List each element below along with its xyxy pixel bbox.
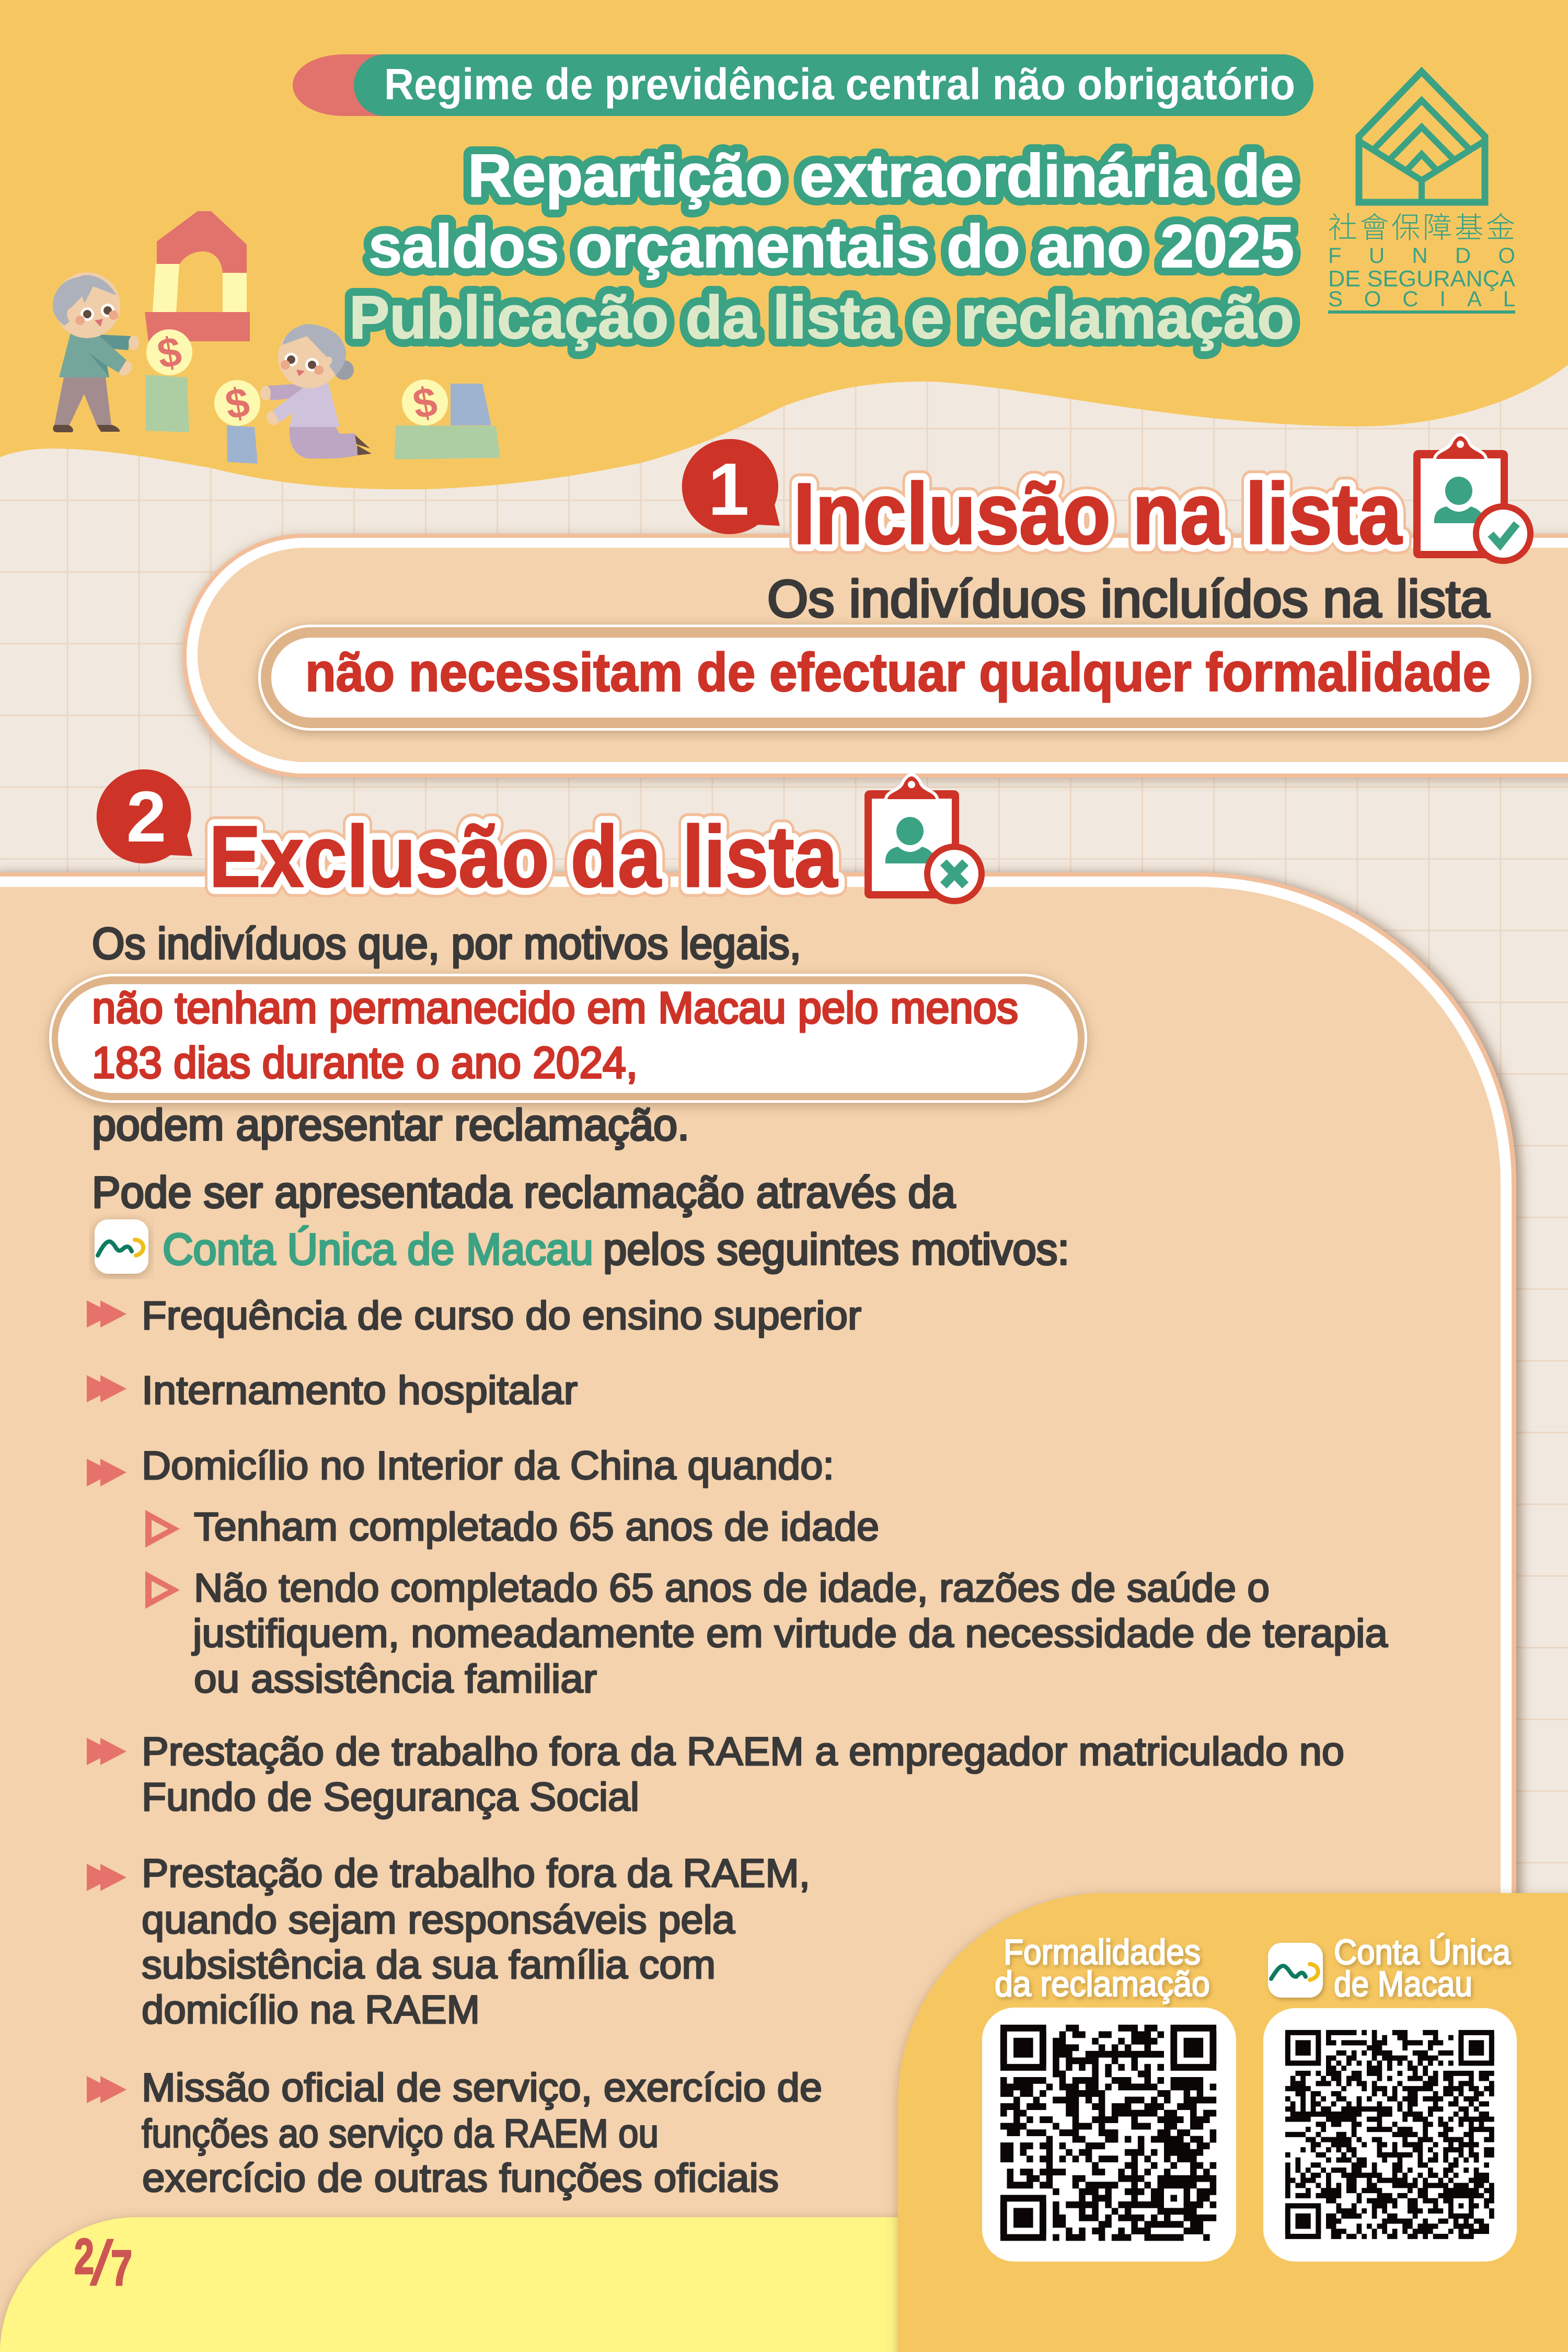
text: legal reasons intro: Os indivíduos que, por motivos legais, — [92, 919, 801, 968]
logo: Fundo de Segurança Social — [1328, 72, 1516, 314]
icon: Conta Única app — [95, 1219, 148, 1274]
list item: official mission: exercício de outras funções oficiais — [142, 2156, 779, 2200]
QR label: complaint formalities: Formalidades — [1004, 1932, 1201, 1972]
callout: 183 days: 183 dias durante o ano 2024, — [92, 1038, 638, 1087]
list item: family support: subsistência da sua família com — [142, 1943, 716, 1987]
illustration: building blocks and coins — [145, 211, 500, 464]
text: complaint channel: Pode ser apresentada reclamação através da — [92, 1168, 955, 1217]
badge number 1 — [682, 439, 780, 534]
sub-item: health reasons: ou assistência familiar — [194, 1657, 597, 1701]
panel: QR codes — [898, 1893, 1568, 2352]
list item: family support — [87, 1851, 810, 2032]
QR label: Conta Única de Macau — [1334, 1932, 1511, 2004]
callout: no formalities: não necessitam de efectuar qualquer formalidade — [305, 642, 1491, 703]
QR card 2 — [1263, 2008, 1517, 2262]
list item: work with matriculated employer: Prestação de trabalho fora da RAEM a empregador matriculado no — [142, 1730, 1344, 1774]
list item: higher education: Frequência de curso do ensino superior — [142, 1294, 861, 1338]
badge number 2: 2 — [126, 777, 166, 857]
QR label: complaint formalities — [995, 1932, 1210, 2004]
sub-item: health reasons: justifiquem, nomeadamente em virtude da necessidade de terapia — [192, 1611, 1388, 1656]
panel: exclusion — [0, 872, 1516, 2352]
page number: / — [89, 2228, 114, 2299]
icon: Conta Única app small — [1268, 1943, 1323, 1998]
icon: clipboard with cross — [864, 775, 985, 904]
title: saldos orçamentais do ano 2025 — [368, 212, 1294, 280]
badge number 2 — [97, 769, 192, 863]
title: Repartição extraordinária de — [468, 142, 1294, 210]
list item: work with matriculated employer: Fundo de Segurança Social — [142, 1775, 639, 1819]
list item: official mission: Missão oficial de serviço, exercício de — [142, 2066, 822, 2110]
text: may file complaint: podem apresentar reclamação. — [92, 1100, 689, 1149]
heading: exclusão da lista: Exclusão da lista — [209, 809, 838, 905]
sub-item: health reasons: Não tendo completado 65 anos de idade, razões de saúde o — [194, 1566, 1270, 1610]
illustration: building blocks and coins: $ — [154, 328, 185, 377]
title — [349, 142, 1294, 351]
logo: Fundo de Segurança Social: DE SEGURANÇA — [1328, 266, 1516, 292]
heading: inclusão na lista: Inclusão na lista — [793, 466, 1403, 562]
QR label: Conta Única de Macau: Conta Única — [1334, 1932, 1511, 1972]
title: saldos orçamentais do ano 2025 — [368, 212, 1294, 280]
list item: work with matriculated employer — [87, 1730, 1344, 1819]
list item: hospital: Internamento hospitalar — [142, 1368, 578, 1413]
QR label: complaint formalities: da reclamação — [995, 1964, 1210, 2004]
list item: domicile in mainland China: Domicílio no Interior da China quando: — [142, 1444, 834, 1488]
title: Repartição extraordinária de — [468, 142, 1294, 210]
title: Publicação da lista e reclamação — [349, 283, 1294, 351]
page number: 2 — [74, 2229, 94, 2285]
heading: exclusão da lista: Exclusão da lista — [209, 809, 838, 905]
text: Conta Única de Macau reasons: Conta Única de Macau — [163, 1225, 593, 1274]
text: individuals on the list: Os indivíduos incluídos na lista — [767, 570, 1490, 628]
badge number 1: 1 — [708, 448, 749, 531]
QR label: Conta Única de Macau: de Macau — [1334, 1964, 1472, 2004]
heading: exclusão da lista: Exclusão da lista — [209, 809, 838, 905]
list item: official mission: funções ao serviço da RAEM ou — [142, 2112, 659, 2156]
heading: inclusão na lista: Inclusão na lista — [793, 466, 1403, 562]
list item: family support: Prestação de trabalho fora da RAEM, — [142, 1851, 810, 1896]
logo: Fundo de Segurança Social: FUNDO — [1328, 243, 1515, 268]
header wave — [0, 0, 1568, 489]
icon: clipboard with check — [1413, 435, 1534, 564]
text: Conta Única de Macau reasons: pelos seguintes motivos: — [603, 1225, 1069, 1274]
top pill: Regime de previdência central não obrigatório — [384, 60, 1295, 109]
footer yellow panel — [0, 2217, 941, 2352]
illustration: building blocks and coins: $ — [222, 378, 253, 428]
illustration: grandfather — [53, 272, 139, 432]
heading: inclusão na lista: Inclusão na lista — [793, 466, 1403, 562]
logo: Fundo de Segurança Social: 社會保障基金 — [1328, 204, 1515, 247]
illustration: building blocks and coins: $ — [409, 378, 441, 428]
title: Publicação da lista e reclamação — [349, 283, 1294, 351]
page number: 7 — [111, 2240, 132, 2296]
panel: inclusion — [182, 534, 1568, 778]
sub-item: age 65: Tenham completado 65 anos de idade — [194, 1505, 879, 1549]
QR card 1 — [982, 2008, 1236, 2262]
page number — [74, 2228, 132, 2299]
callout: 183 days: não tenham permanecido em Macau pelo menos — [92, 983, 1018, 1032]
list item: family support: domicílio na RAEM — [142, 1988, 480, 2032]
list item: official mission — [87, 2066, 822, 2200]
logo: Fundo de Segurança Social: SOCIAL — [1328, 286, 1515, 311]
sub-item: health reasons — [145, 1566, 1388, 1701]
list item: family support: quando sejam responsáveis pela — [142, 1898, 735, 1942]
callout: no formalities — [258, 625, 1531, 731]
illustration: grandmother — [260, 324, 372, 458]
text: Conta Única de Macau reasons — [163, 1225, 1069, 1274]
callout: 183 days — [49, 974, 1087, 1103]
